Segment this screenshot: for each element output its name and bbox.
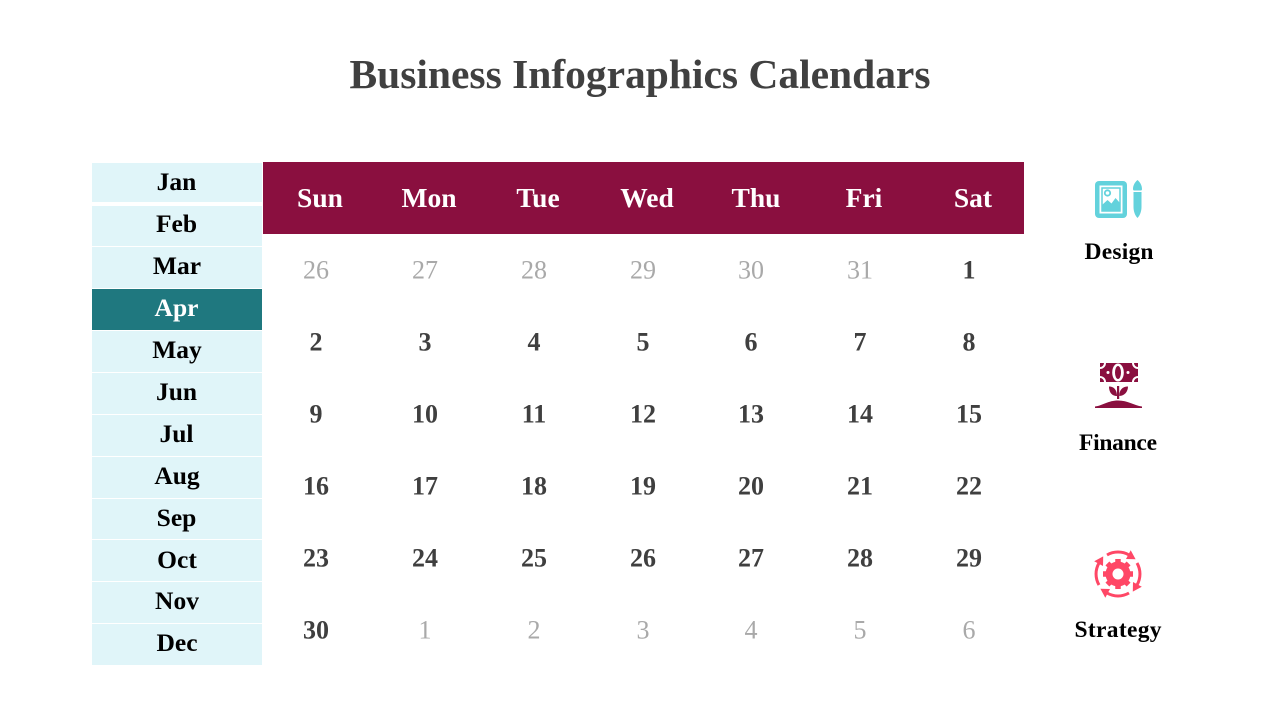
- month: Nov: [92, 582, 262, 623]
- month: Sep: [92, 499, 262, 539]
- calendar day grid: 20: [738, 472, 764, 500]
- calendar day grid: 23: [303, 544, 329, 572]
- month: Jul: Jul: [159, 419, 194, 448]
- calendar day grid: 22: [956, 472, 982, 500]
- calendar day grid: 27: [412, 256, 438, 284]
- calendar day grid: 25: [521, 544, 547, 572]
- calendar day grid: 3: [636, 616, 650, 644]
- month: Jul: [92, 415, 262, 456]
- calendar day grid: 12: [630, 400, 656, 428]
- calendar day grid: 5: [636, 328, 650, 356]
- label: Strategy: Strategy: [1074, 617, 1162, 643]
- icon: finance: [1095, 363, 1142, 408]
- month: Dec: [92, 624, 262, 665]
- month: Jan: [92, 163, 262, 202]
- calendar day grid: 1: [962, 256, 976, 284]
- calendar header: Wed: [620, 182, 674, 213]
- calendar day grid: 2: [310, 328, 322, 356]
- month: Dec: Dec: [156, 628, 198, 657]
- month: May: May: [152, 335, 202, 364]
- calendar day grid: 13: [738, 400, 764, 428]
- calendar day grid: 8: [962, 328, 976, 356]
- calendar day grid: 4: [528, 328, 540, 356]
- calendar day grid: 6: [962, 616, 976, 644]
- calendar day grid: 11: [522, 400, 546, 428]
- calendar day grid: 26: [303, 256, 329, 284]
- calendar day grid: 30: [303, 616, 329, 644]
- month: Jun: Jun: [156, 377, 197, 406]
- calendar day grid: 30: [738, 256, 764, 284]
- month: Oct: Oct: [157, 545, 197, 574]
- month: Aug: Aug: [154, 461, 200, 490]
- month: Feb: [92, 206, 262, 246]
- label: Design: Design: [1084, 239, 1154, 265]
- calendar day grid: 21: [847, 472, 873, 500]
- calendar day grid: 5: [854, 616, 866, 644]
- calendar day grid: 7: [854, 328, 866, 356]
- calendar header: Fri: [846, 182, 883, 213]
- calendar day grid: 27: [738, 544, 764, 572]
- calendar header: Tue: [516, 182, 560, 213]
- icon: design: [1095, 180, 1142, 218]
- calendar day grid: [303, 256, 982, 644]
- calendar day grid: 10: [412, 400, 438, 428]
- icon: strategy: [1094, 550, 1142, 598]
- month: Jun: [92, 373, 262, 414]
- calendar day grid: 4: [744, 616, 758, 644]
- calendar header: Sat: [954, 182, 993, 213]
- calendar day grid: 29: [956, 544, 982, 572]
- calendar day grid: 3: [418, 328, 432, 356]
- calendar day grid: 19: [630, 472, 656, 500]
- calendar day grid: 18: [521, 472, 547, 500]
- calendar day grid: 15: [956, 400, 982, 428]
- month: Nov: Nov: [155, 586, 199, 615]
- calendar day grid: 31: [847, 256, 873, 284]
- calendar day grid: 24: [412, 544, 438, 572]
- calendar day grid: 28: [521, 256, 547, 284]
- calendar day grid: 14: [847, 400, 873, 428]
- calendar day grid: 16: [303, 472, 329, 500]
- calendar header: Thu: [732, 182, 780, 213]
- month: Apr (selected): Apr: [155, 293, 198, 322]
- calendar day grid: 28: [847, 544, 873, 572]
- calendar day grid: 2: [528, 616, 540, 644]
- calendar header: Mon: [402, 182, 456, 213]
- month: Apr (selected): [92, 289, 262, 330]
- calendar header: [263, 162, 1024, 234]
- calendar day grid: 26: [630, 544, 656, 572]
- month: Sep: Sep: [157, 503, 196, 532]
- panel: month list: [92, 163, 262, 665]
- month: Mar: Mar: [153, 251, 201, 280]
- calendar day grid: 1: [418, 616, 432, 644]
- month: May: [92, 331, 262, 372]
- month: Jan: Jan: [157, 167, 196, 196]
- month: Oct: [92, 540, 262, 581]
- month: Aug: [92, 457, 262, 498]
- calendar day grid: 6: [744, 328, 758, 356]
- month: Mar: [92, 247, 262, 288]
- calendar day grid: 9: [310, 400, 322, 428]
- month: Feb: Feb: [156, 209, 197, 238]
- calendar day grid: 17: [412, 472, 438, 500]
- label: Finance: Finance: [1079, 430, 1157, 456]
- calendar day grid: 29: [630, 256, 656, 284]
- title: Business Infographics Calendars: [350, 51, 930, 97]
- calendar header: Sun: [297, 182, 343, 213]
